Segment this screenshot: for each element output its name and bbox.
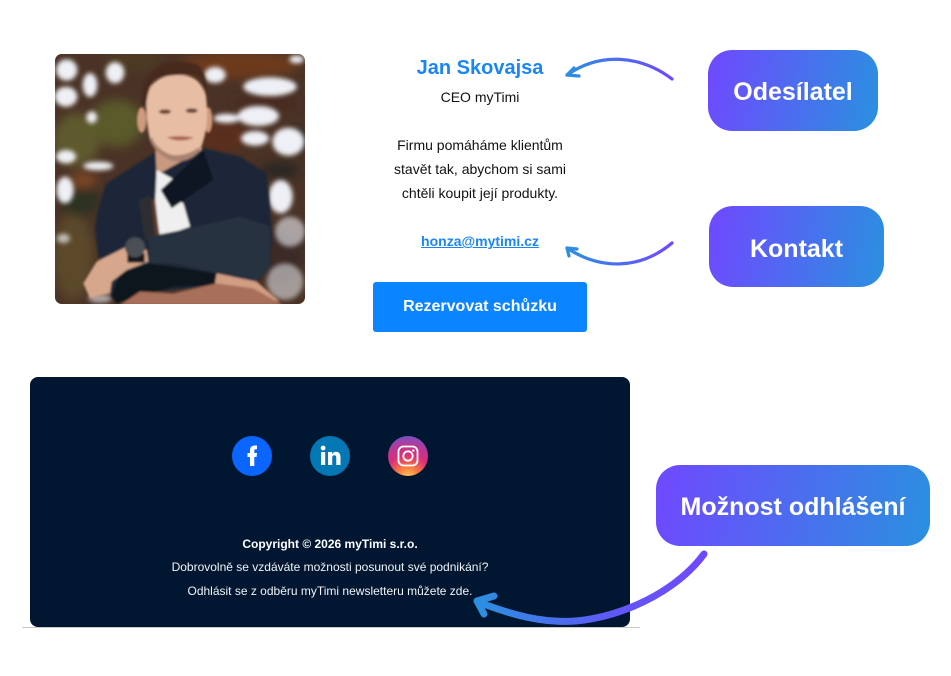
sender role: CEO myTimi: [441, 89, 519, 105]
arrow: Odesílatel to name: [567, 59, 672, 79]
footer background: [30, 377, 630, 627]
signature text: chtěli koupit její produkty.: [402, 185, 558, 201]
panel: dark footer: [22, 377, 640, 628]
unsubscribe question: Dobrovolně se vzdáváte možnosti posunout své podnikání?: [172, 560, 488, 574]
jacket body: [95, 148, 272, 297]
badge: Kontakt: Kontakt: [750, 235, 843, 263]
arrow: Možnost odhlášení to unsubscribe text: [477, 554, 704, 621]
badge: Možnost odhlášení: Možnost odhlášení: [680, 493, 906, 521]
photo: portrait of man: [30, 54, 870, 476]
badge: Odesílatel: [708, 50, 878, 131]
booking button: [373, 282, 587, 332]
contact email: honza@mytimi.cz: [421, 233, 539, 249]
icon: linkedin: [310, 436, 350, 476]
icon: instagram: [388, 436, 428, 476]
signature text: [394, 137, 566, 201]
badge: Kontakt: [709, 206, 884, 287]
arrow: Kontakt to email: [567, 243, 672, 264]
signature text: Firmu pomáháme klientům: [397, 137, 563, 153]
footer divider line: [22, 627, 640, 628]
unsubscribe text: Odhlásit se z odběru myTimi newsletteru můžete zde.: [187, 584, 472, 598]
badge: Možnost odhlášení: [656, 465, 930, 546]
copyright: Copyright © 2026 myTimi s.r.o.: [242, 537, 418, 551]
signature text: stavět tak, abychom si sami: [394, 161, 566, 177]
badge: Odesílatel: Odesílatel: [733, 78, 853, 106]
icon: facebook: [232, 436, 272, 476]
booking button: Rezervovat schůzku: [403, 298, 557, 315]
sender name: Jan Skovajsa: [417, 57, 543, 79]
